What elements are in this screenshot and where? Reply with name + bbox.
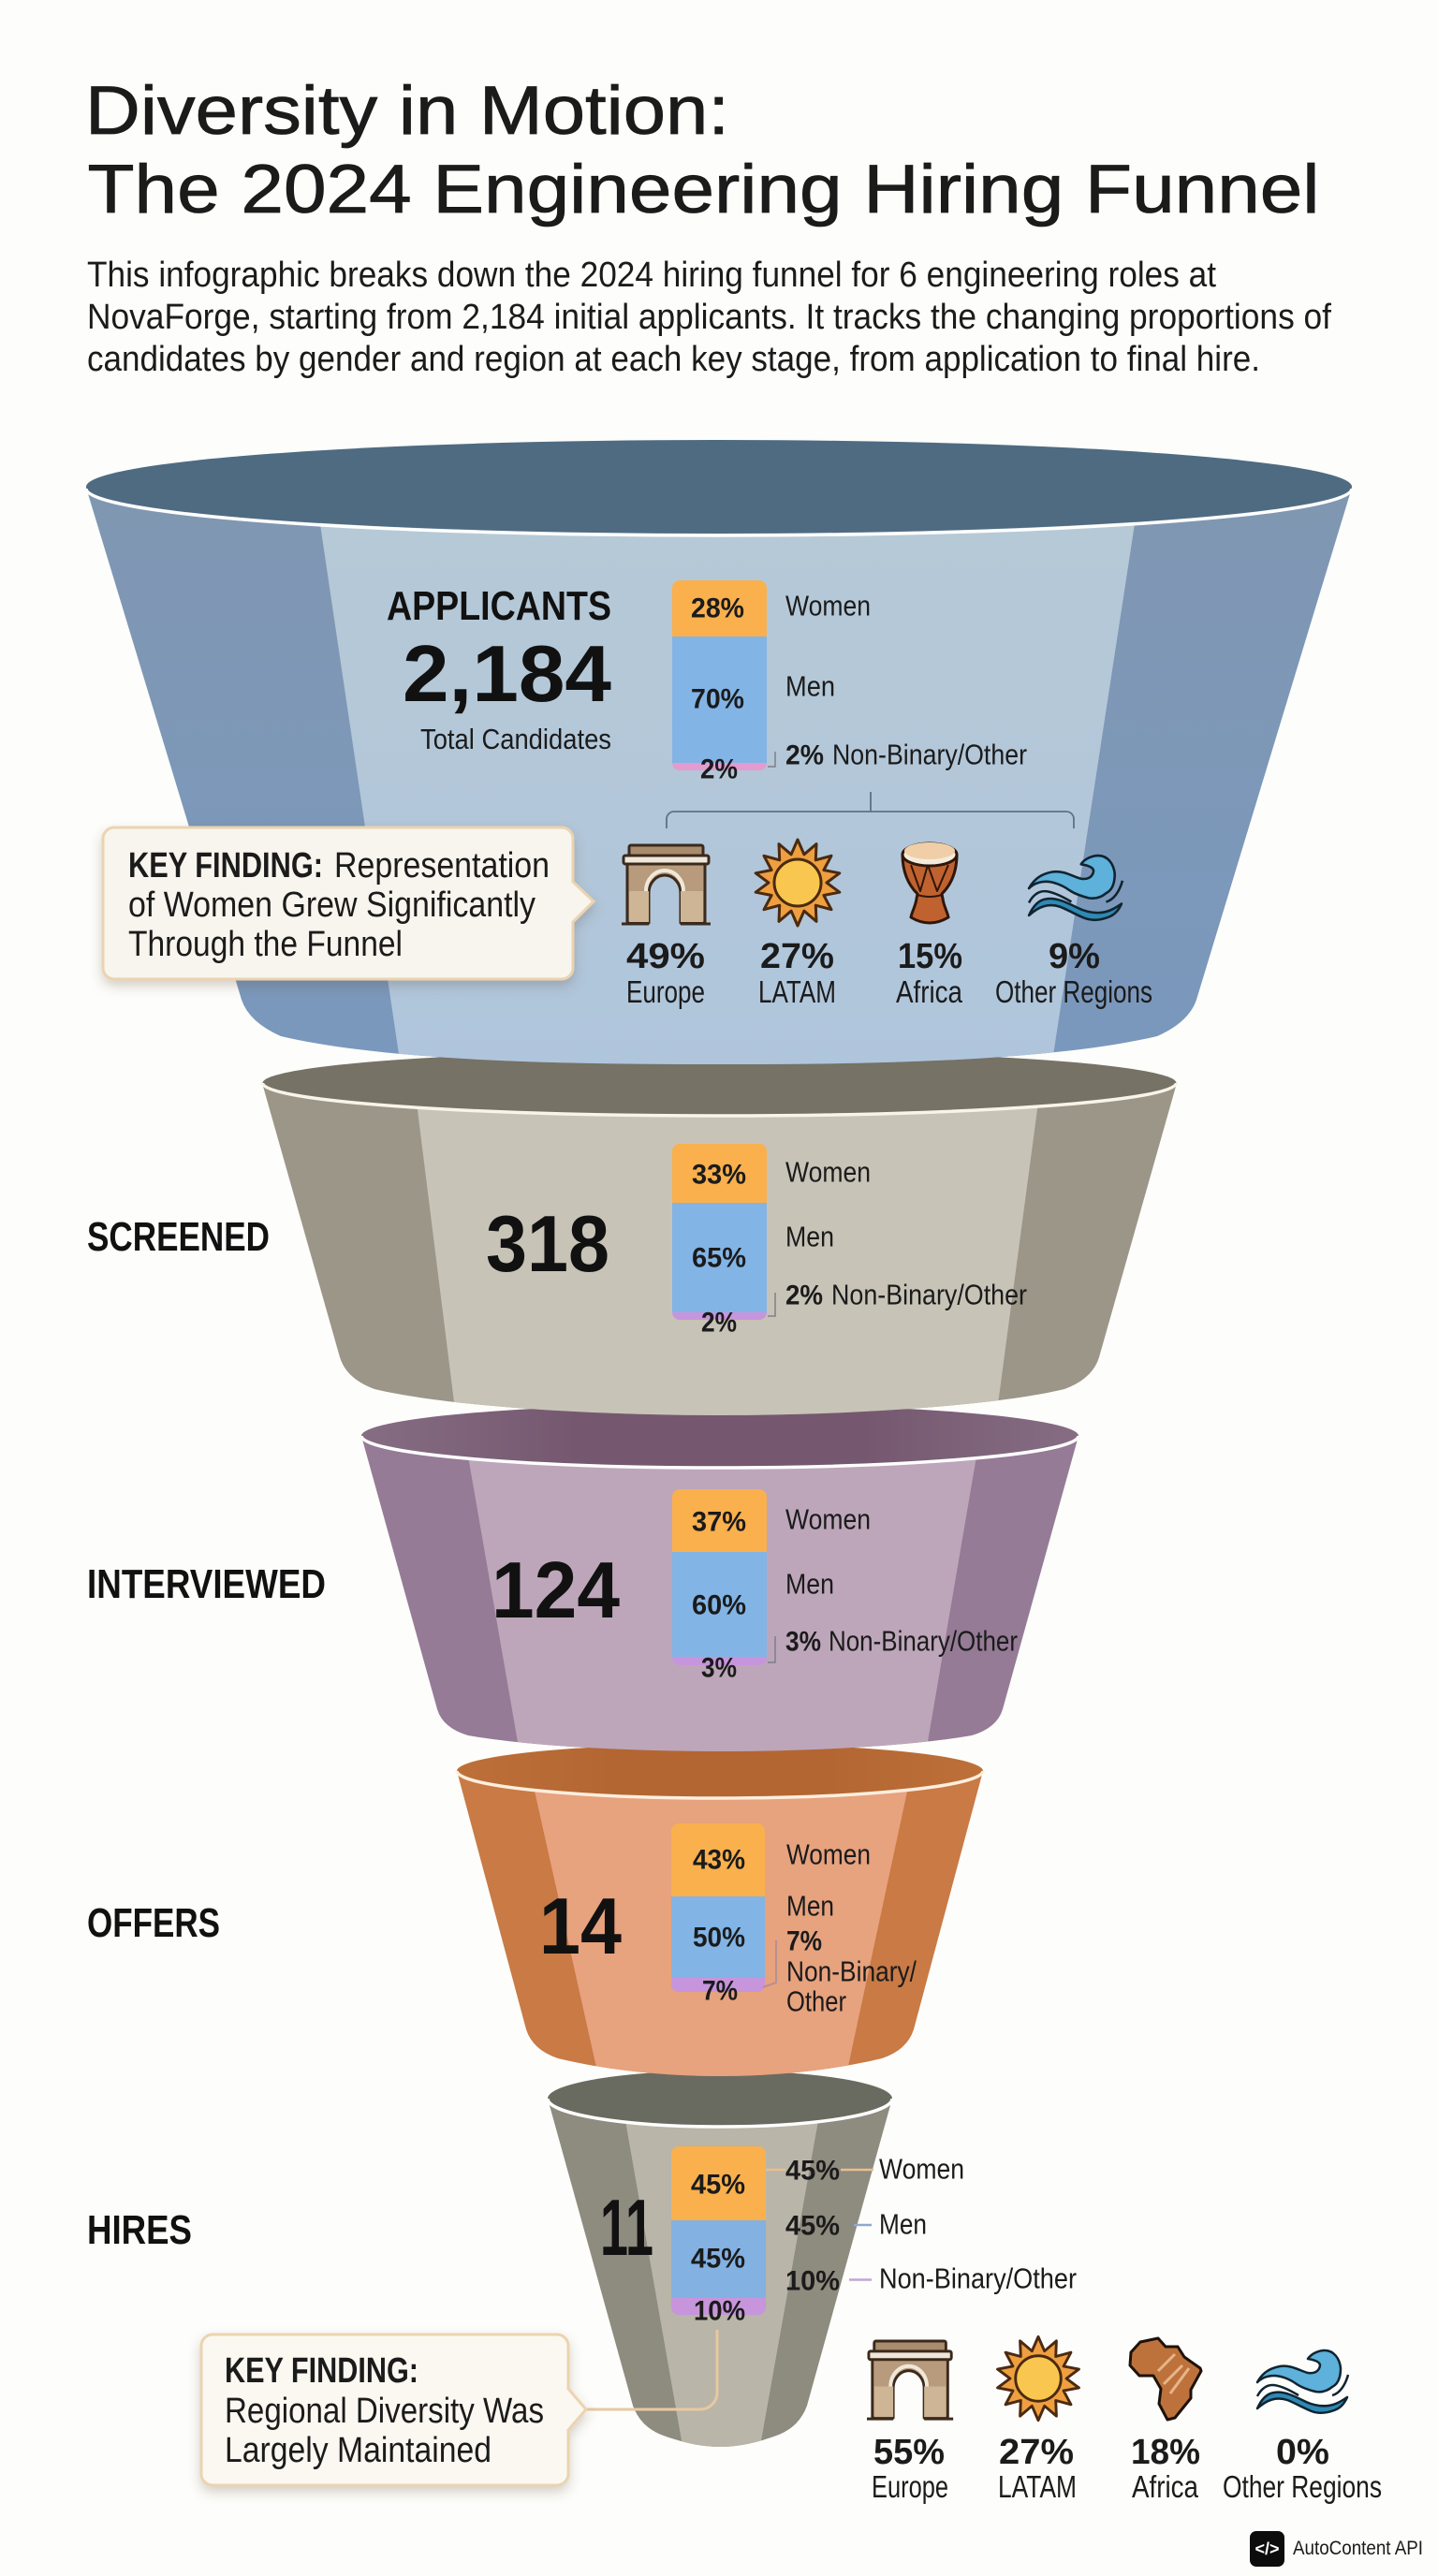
screened legend: 2%: [785, 1281, 823, 1310]
applicants region: latam: 27%: [760, 937, 834, 976]
offers legend: Men: [786, 1889, 834, 1923]
stage label: hires: HIRES: [87, 2207, 192, 2253]
screened gender bar: 65%: [692, 1243, 746, 1273]
hires funnel body: [548, 2071, 892, 2462]
hires region: other: Other Regions: [1223, 2469, 1382, 2504]
hires legend: 10%: [785, 2265, 840, 2297]
hires legend: Non-Binary/Other: [879, 2261, 1077, 2295]
hires gender bar: [671, 2146, 766, 2327]
icon: wave: [1029, 856, 1123, 920]
applicants gender bar: 2%: [700, 754, 738, 784]
screened gender bar: 33%: [692, 1159, 746, 1191]
hires region: latam: [998, 2336, 1078, 2504]
title: Diversity in Motion:: [85, 73, 729, 149]
title: [85, 73, 1320, 227]
applicants connector: [768, 752, 775, 767]
hires region: africa: Africa: [1132, 2469, 1199, 2504]
screened legend: Non-Binary/Other: [831, 1279, 1027, 1310]
callout: key finding regional diversity: [201, 2330, 717, 2485]
applicants region: other: [995, 856, 1152, 1009]
intro paragraph: NovaForge, starting from 2,184 initial applicants. It tracks the changing proportions of: [87, 298, 1331, 337]
hires legend: 45%: [785, 2155, 840, 2187]
interviewed gender bar: 60%: [692, 1589, 746, 1621]
interviewed legend: Men: [785, 1567, 834, 1601]
interviewed gender bar: [672, 1489, 767, 1683]
icon: wave: [1257, 2350, 1348, 2413]
screened funnel body: [262, 1050, 1177, 1432]
interviewed total: 124: [492, 1546, 620, 1635]
applicants legend: Men: [785, 670, 835, 702]
hires region: latam: 27%: [999, 2433, 1074, 2472]
hires legend: Women: [879, 2153, 964, 2185]
icon: arch: [867, 2341, 953, 2419]
screened legend: [785, 1155, 1027, 1310]
offers legend: Non-Binary/: [786, 1954, 917, 1988]
interviewed legend: 3%: [785, 1627, 821, 1657]
callout: key finding representation of women: KEY FINDING:: [128, 846, 323, 886]
applicants region: africa: Africa: [896, 974, 963, 1009]
applicants legend: Non-Binary/Other: [832, 738, 1027, 771]
applicants legend: Women: [785, 590, 871, 622]
hires legend: [766, 2153, 1077, 2297]
funnel stage: screened: [262, 1050, 1177, 1432]
icon: drum: [902, 842, 957, 923]
applicants region: africa: 15%: [898, 937, 962, 976]
title: The 2024 Engineering Hiring Funnel: [88, 152, 1320, 227]
logo: AutoContent API: [1250, 2531, 1423, 2567]
screened legend: Women: [785, 1155, 871, 1189]
logo: AutoContent API: AutoContent API: [1293, 2538, 1423, 2559]
applicants total: 2,184: [403, 630, 611, 719]
offers total: 14: [539, 1882, 622, 1971]
interviewed funnel body: [361, 1404, 1078, 1769]
offers legend: Women: [786, 1838, 871, 1870]
stage label: offers: OFFERS: [87, 1900, 220, 1946]
hires region: europe: Europe: [872, 2469, 948, 2504]
total candidates caption: Total Candidates: [420, 723, 611, 755]
screened gender bar: [672, 1144, 767, 1339]
callout: key finding regional diversity: Regional Diversity Was: [225, 2392, 544, 2431]
offers gender bar: 50%: [693, 1923, 745, 1953]
applicants region: europe: 49%: [626, 937, 705, 976]
offers gender bar: 43%: [693, 1844, 745, 1876]
offers gender bar: [671, 1823, 765, 2007]
offers gender bar: 7%: [702, 1975, 738, 2007]
callout: key finding representation of women: Representation: [334, 846, 550, 886]
applicants region: europe: [622, 845, 711, 1009]
hires gender bar: 45%: [691, 2170, 745, 2200]
hires gender bar: 10%: [694, 2295, 745, 2327]
funnel stage: offers: [457, 1744, 983, 2097]
callout: key finding representation of women: [103, 827, 594, 979]
intro paragraph: This infographic breaks down the 2024 hiring funnel for 6 engineering roles at: [87, 256, 1216, 295]
screened gender bar: 2%: [701, 1307, 737, 1339]
hires region: europe: 55%: [873, 2433, 945, 2472]
funnel stage: applicants: [86, 440, 1352, 1086]
applicants region: other: 9%: [1049, 937, 1100, 976]
offers funnel body: [457, 1744, 983, 2097]
hires region: other: [1223, 2350, 1382, 2504]
logo: AutoContent API: </>: [1255, 2539, 1280, 2558]
icon: arch: [622, 845, 711, 924]
applicants gender bar: [672, 580, 767, 784]
callout: key finding regional diversity: Largely Maintained: [225, 2431, 492, 2470]
offers connector: [763, 1940, 776, 1987]
funnel stage: interviewed: [361, 1404, 1078, 1769]
intro paragraph: candidates by gender and region at each key stage, from application to final hire.: [87, 340, 1260, 379]
screened connector: [768, 1293, 775, 1316]
offers legend: Other: [786, 1984, 846, 2018]
interviewed gender bar: 37%: [692, 1507, 746, 1537]
icon: sun: [756, 840, 840, 926]
applicants region: europe: Europe: [626, 974, 705, 1009]
hires legend: Men: [879, 2207, 927, 2241]
hires region: europe: [867, 2341, 953, 2504]
hires region: africa: [1130, 2338, 1201, 2504]
offers legend: 7%: [786, 1926, 822, 1956]
callout: key finding representation of women: Through the Funnel: [128, 925, 403, 964]
hires gender bar: 45%: [691, 2243, 745, 2275]
applicants gender bar: 70%: [691, 683, 744, 715]
callout: key finding regional diversity: KEY FINDING:: [225, 2351, 418, 2391]
applicants region: latam: LATAM: [758, 974, 836, 1009]
applicants region: africa: [896, 842, 963, 1009]
interviewed legend: Women: [785, 1503, 871, 1535]
applicants heading: APPLICANTS: [387, 583, 611, 629]
applicants region: other: Other Regions: [995, 974, 1152, 1009]
screened total: 318: [486, 1200, 609, 1289]
interviewed gender bar: 3%: [701, 1653, 737, 1683]
hires total: 11: [600, 2184, 653, 2273]
interviewed legend: [785, 1503, 1018, 1657]
hires legend: 45%: [785, 2211, 840, 2241]
hires region: latam: LATAM: [998, 2469, 1077, 2504]
callout: key finding representation of women: of Women Grew Significantly: [128, 886, 536, 925]
offers legend: [786, 1838, 917, 2018]
interviewed legend: Non-Binary/Other: [829, 1625, 1018, 1657]
stage label: interviewed: INTERVIEWED: [87, 1561, 326, 1607]
hires region: other: 0%: [1276, 2433, 1329, 2472]
applicants legend: [785, 590, 1027, 771]
interviewed connector: [768, 1636, 775, 1662]
hires region: africa: 18%: [1131, 2433, 1200, 2472]
region bracket: [667, 792, 1074, 828]
icon: sun: [998, 2336, 1078, 2421]
stage label: screened: SCREENED: [87, 1214, 270, 1260]
intro paragraph: [87, 256, 1331, 379]
icon: africa map: [1130, 2338, 1201, 2420]
applicants funnel body: [86, 440, 1352, 1086]
applicants region: latam: [756, 840, 840, 1009]
screened legend: Men: [785, 1221, 834, 1252]
funnel stage: hires: [548, 2071, 892, 2462]
applicants gender bar: 28%: [691, 593, 744, 623]
applicants legend: 2%: [785, 739, 824, 771]
